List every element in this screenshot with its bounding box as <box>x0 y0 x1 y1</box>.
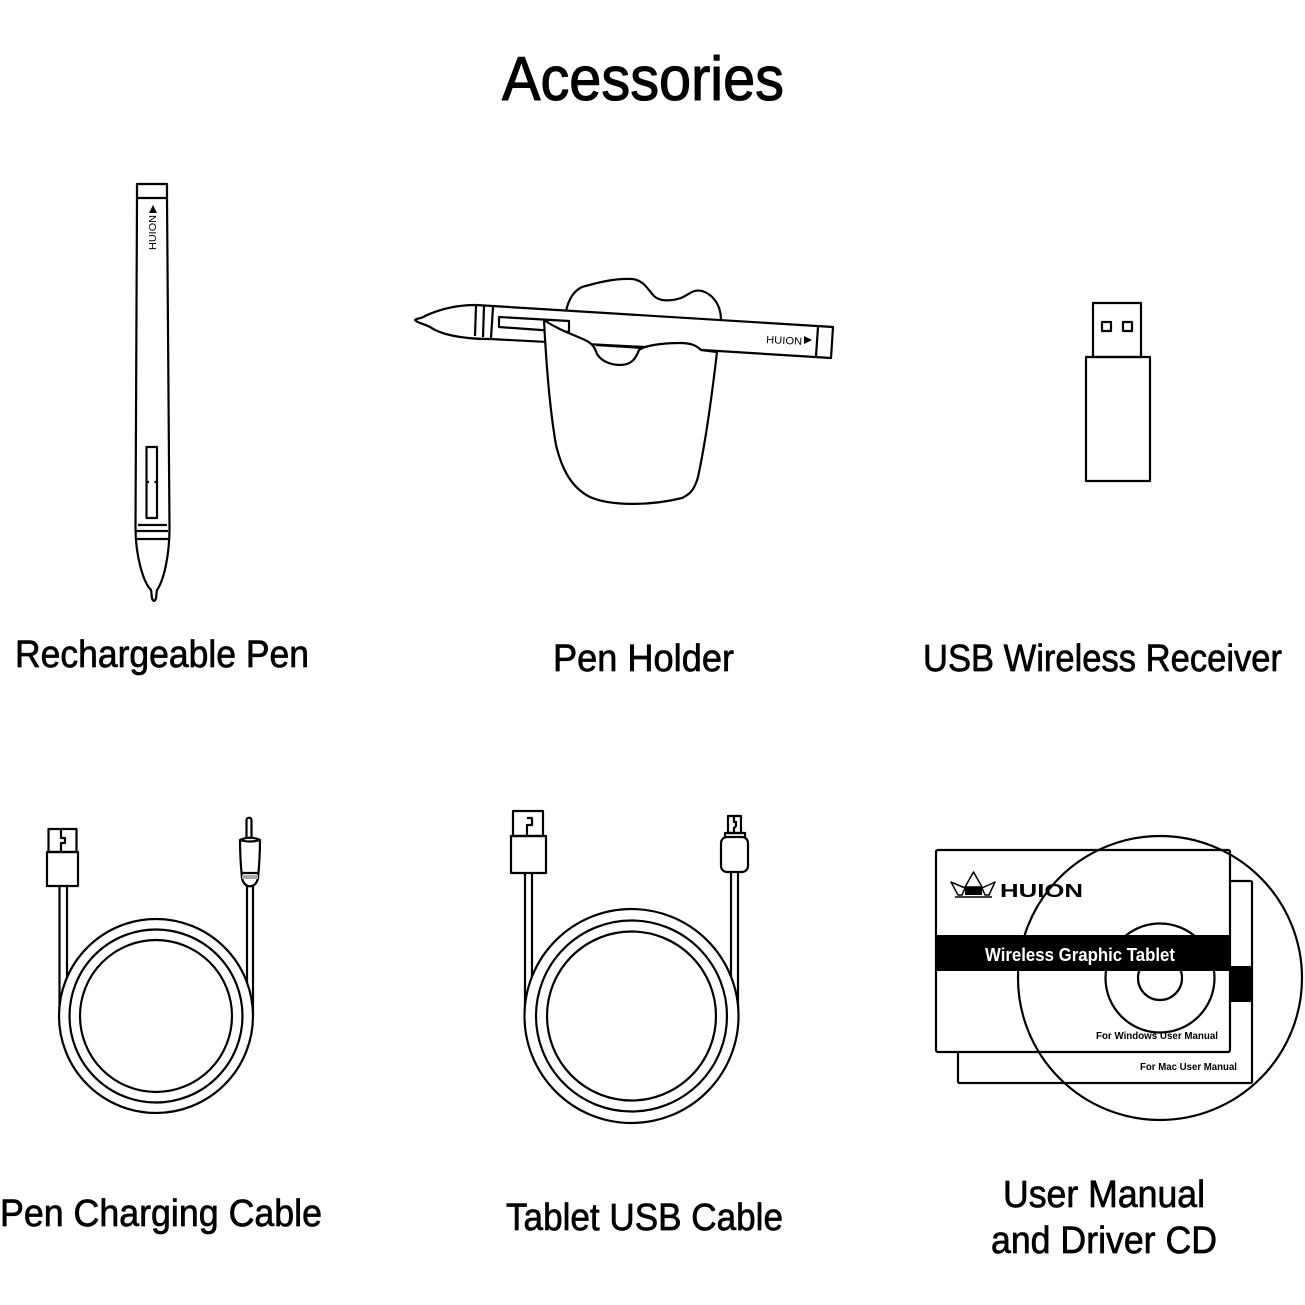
icon: coiled usb cable <box>511 811 748 1123</box>
icon: pen holder with pen: HUION <box>766 334 802 348</box>
icon: manuals and cd: Wireless Graphic Tablet <box>985 945 1175 965</box>
icon: manuals and cd <box>936 836 1302 1120</box>
panel: usb wireless receiver <box>923 303 1282 680</box>
label: user manual and driver cd: and Driver CD <box>991 1220 1217 1262</box>
icon: vertical pen <box>136 184 170 601</box>
icon: manuals and cd: For Mac User Manual <box>1140 1061 1237 1073</box>
label: user manual and driver cd: User Manual <box>1003 1174 1205 1216</box>
label: pen holder: Pen Holder <box>553 638 734 680</box>
label: tablet usb cable: Tablet USB Cable <box>506 1197 783 1239</box>
label: rechargeable pen: Rechargeable Pen <box>15 634 309 676</box>
logo: huion crown: HUION <box>1000 881 1083 901</box>
panel: tablet usb cable <box>506 811 783 1239</box>
label: pen charging cable: Pen Charging Cable <box>0 1193 322 1235</box>
label: user manual and driver cd <box>991 1174 1217 1262</box>
icon: coiled charging cable <box>47 818 260 1113</box>
title: Acessories <box>502 45 784 114</box>
panel: pen charging cable <box>0 818 322 1235</box>
icon: usb dongle <box>1086 303 1150 481</box>
icon: manuals and cd: For Windows User Manual <box>1096 1030 1218 1042</box>
icon: pen holder with pen <box>415 279 833 504</box>
icon: vertical pen: HUION <box>148 215 159 250</box>
panel: user manual and driver cd <box>936 836 1302 1262</box>
panel: pen holder <box>415 279 833 680</box>
logo: huion crown <box>951 872 1083 901</box>
panel: rechargeable pen <box>15 184 309 676</box>
